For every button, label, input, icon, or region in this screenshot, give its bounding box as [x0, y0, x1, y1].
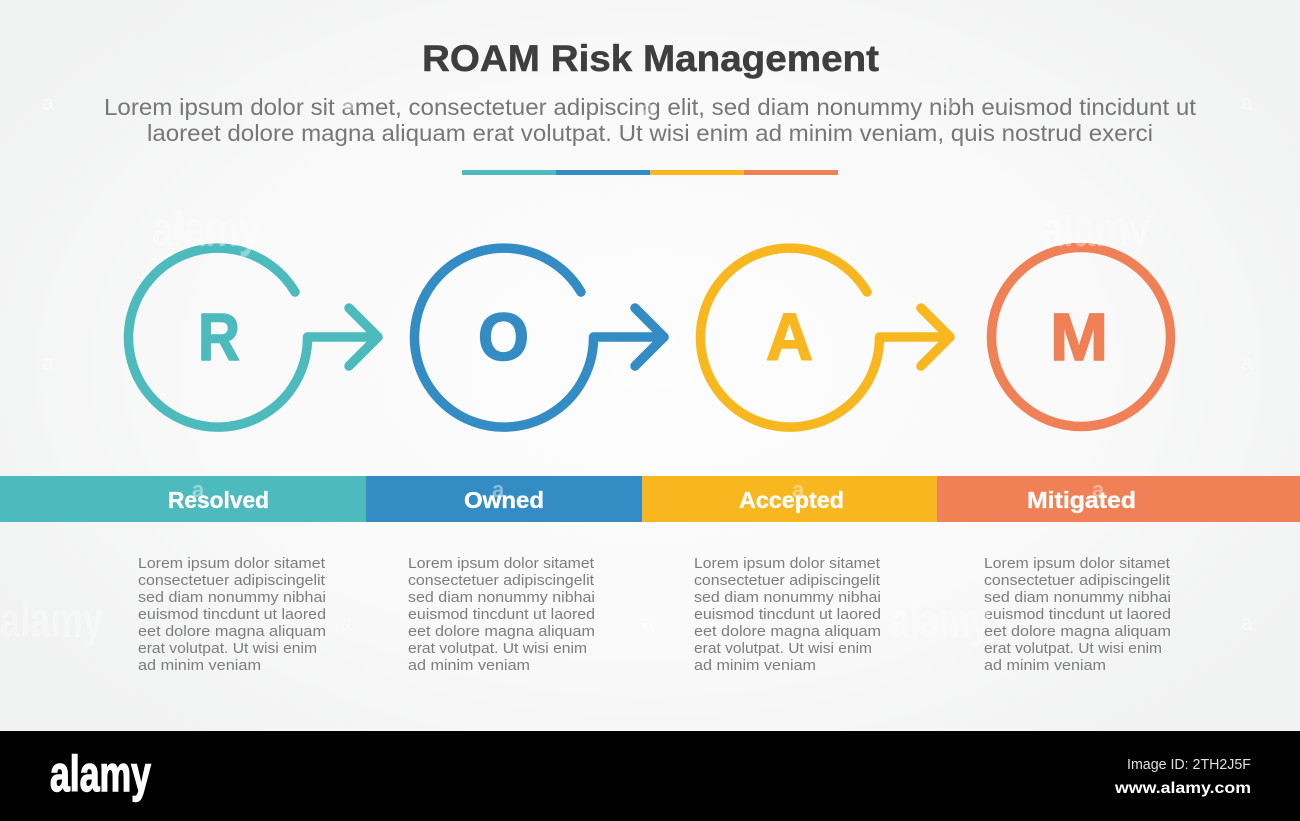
- text block: Resolved: eet dolore magna aliquam: [138, 624, 326, 640]
- text block: Owned: eet dolore magna aliquam: [408, 624, 595, 640]
- watermarks: a: [42, 350, 55, 375]
- watermarks: alamy: [890, 592, 990, 648]
- intro text: laoreet dolore magna aliquam erat volutpat. Ut wisi enim ad minim veniam, quis nostrud exerci: [147, 120, 1153, 146]
- watermarks: a: [1241, 90, 1254, 115]
- watermarks: a: [342, 90, 355, 115]
- watermarks: a: [940, 90, 953, 115]
- text block: Accepted: erat volutpat. Ut wisi enim: [694, 641, 872, 657]
- text block: Owned: consectetuer adipiscingelit: [408, 573, 594, 589]
- text block: Accepted: eet dolore magna aliquam: [694, 624, 881, 640]
- band: Resolved: Resolved: [168, 487, 269, 513]
- footer logo: alamy: [50, 746, 151, 802]
- watermarks: alamy: [0, 592, 103, 648]
- text block: Owned: [408, 556, 595, 674]
- watermarks: a: [42, 90, 55, 115]
- watermarks: a: [792, 477, 805, 502]
- icon: A circle with arrow: [701, 248, 950, 427]
- text block: Mitigated: euismod tincdunt ut laored: [984, 607, 1171, 623]
- text block: Accepted: sed diam nonummy nibhai: [694, 590, 881, 606]
- text block: Mitigated: consectetuer adipiscingelit: [984, 573, 1170, 589]
- footer bar: [0, 731, 1300, 821]
- band: Accepted: Accepted: [739, 487, 844, 513]
- text block: Mitigated: [984, 556, 1171, 674]
- text block: Mitigated: erat volutpat. Ut wisi enim: [984, 641, 1162, 657]
- text block: Accepted: ad minim veniam: [694, 658, 816, 674]
- icon: M circle: [992, 248, 1170, 426]
- band: Owned: [366, 476, 642, 522]
- text block: Resolved: consectetuer adipiscingelit: [138, 573, 325, 589]
- text block: Resolved: Lorem ipsum dolor sitamet: [138, 556, 325, 572]
- text block: Owned: erat volutpat. Ut wisi enim: [408, 641, 587, 657]
- band: Mitigated: [937, 476, 1300, 522]
- text block: Accepted: Lorem ipsum dolor sitamet: [694, 556, 880, 572]
- text block: Resolved: ad minim veniam: [138, 658, 261, 674]
- watermarks: a: [192, 477, 205, 502]
- image id: Image ID: 2TH2J5F: [1127, 756, 1251, 773]
- watermarks: a: [492, 477, 505, 502]
- text block: Accepted: consectetuer adipiscingelit: [694, 573, 880, 589]
- watermarks: a: [1241, 350, 1254, 375]
- watermarks: a: [1241, 610, 1254, 635]
- watermarks: a: [340, 610, 353, 635]
- band: Resolved: [0, 476, 366, 522]
- icon: O circle with arrow: O: [478, 300, 529, 375]
- text block: Owned: euismod tincdunt ut laored: [408, 607, 595, 623]
- text block: Accepted: euismod tincdunt ut laored: [694, 607, 881, 623]
- band: Owned: Owned: [464, 487, 544, 513]
- watermarks: a: [642, 96, 655, 121]
- intro text: Lorem ipsum dolor sit amet, consectetuer adipiscing elit, sed diam nonummy nibh euismod tincidunt ut: [104, 94, 1197, 120]
- text block: Owned: ad minim veniam: [408, 658, 530, 674]
- text block: Mitigated: ad minim veniam: [984, 658, 1106, 674]
- text block: Resolved: erat volutpat. Ut wisi enim: [138, 641, 317, 657]
- icon: M circle: M: [1050, 300, 1108, 375]
- watermarks: alamy: [1042, 201, 1150, 257]
- icon: R circle with arrow: R: [198, 300, 240, 375]
- watermarks: [0, 90, 1254, 648]
- text block: Resolved: [138, 556, 326, 674]
- icon: A circle with arrow: A: [766, 300, 813, 375]
- text block: Owned: Lorem ipsum dolor sitamet: [408, 556, 594, 572]
- icon: O circle with arrow: [415, 248, 664, 427]
- text block: Mitigated: Lorem ipsum dolor sitamet: [984, 556, 1170, 572]
- text block: Mitigated: eet dolore magna aliquam: [984, 624, 1171, 640]
- text block: Mitigated: sed diam nonummy nibhai: [984, 590, 1171, 606]
- watermarks: a: [1092, 477, 1105, 502]
- icon: R circle with arrow: [129, 248, 378, 427]
- text block: Resolved: euismod tincdunt ut laored: [138, 607, 326, 623]
- watermarks: a: [642, 610, 655, 635]
- text block: Resolved: sed diam nonummy nibhai: [138, 590, 326, 606]
- divider: four colour rule: [462, 170, 838, 175]
- band: Mitigated: Mitigated: [1027, 487, 1136, 513]
- intro text: [104, 94, 1197, 146]
- text block: Accepted: [694, 556, 881, 674]
- watermarks: alamy: [152, 201, 260, 257]
- website: www.alamy.com: [1114, 780, 1251, 797]
- title: ROAM Risk Management: [422, 38, 879, 79]
- text block: Owned: sed diam nonummy nibhai: [408, 590, 595, 606]
- band: Accepted: [642, 476, 937, 522]
